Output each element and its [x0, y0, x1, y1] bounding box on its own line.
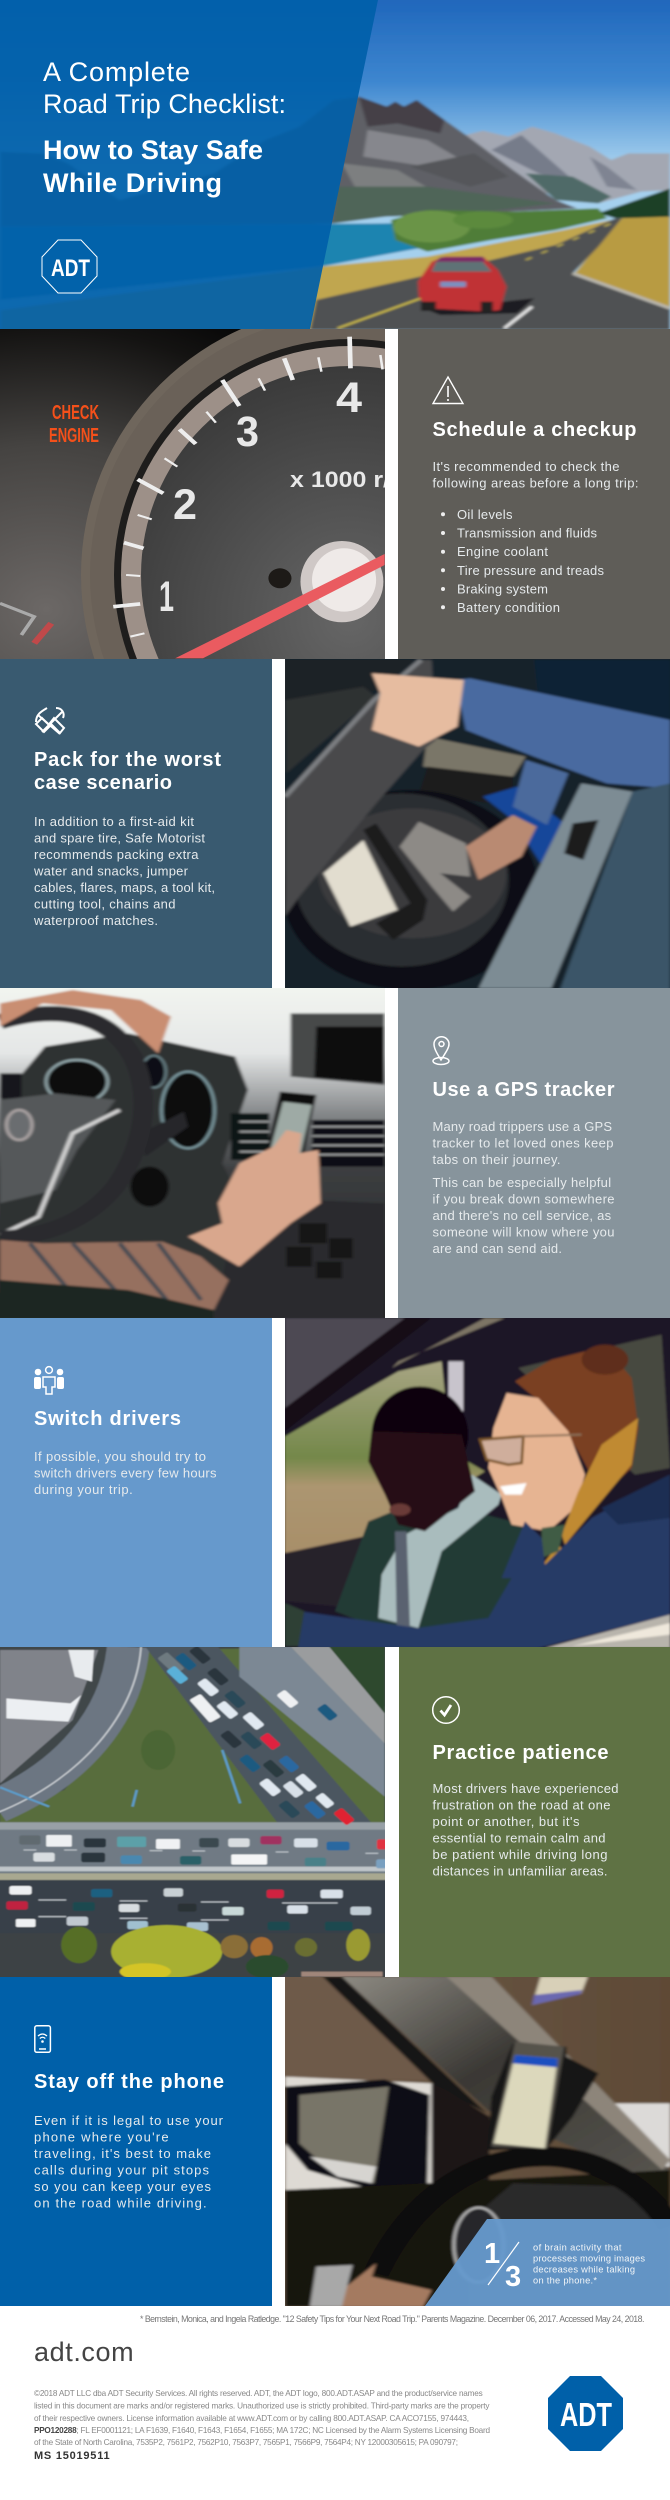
panel: pack for the worst case scenario: [0, 659, 272, 988]
body text: distances in unfamiliar areas.: [432, 1864, 608, 1878]
body text: tabs on their journey.: [432, 1152, 560, 1167]
body text: cables, flares, maps, a tool kit,: [34, 880, 215, 895]
photo: hand touching phone on dashboard: [0, 987, 389, 1320]
body text: [33, 814, 215, 928]
body text: are and can send aid.: [432, 1241, 562, 1256]
legal text: [34, 2389, 490, 2462]
legal text: MS 15019511: [34, 2450, 110, 2462]
callout text: on the phone.*: [533, 2276, 597, 2286]
callout text: of brain activity that: [533, 2242, 622, 2252]
bulleted list: Transmission and fluids: [457, 526, 598, 540]
panel: stay off the phone: [0, 1977, 272, 2306]
panel: use a GPS tracker: [398, 988, 670, 1318]
callout text: decreases while talking: [533, 2264, 635, 2274]
body text: frustration on the road at one: [432, 1798, 610, 1812]
body text: recommends packing extra: [34, 847, 199, 862]
intro text: It's recommended to check the: [432, 459, 620, 474]
footnote: * Bernstein, Monica, and Ingela Ratledge. "12 Safety Tips for Your Next Road Trip." Parents Magazine. December 06, 2017. Accessed May 24, 2018.: [140, 2314, 645, 2324]
body text: if you break down somewhere: [432, 1192, 614, 1206]
heading: [34, 749, 221, 794]
body text: someone will know where you: [432, 1224, 614, 1240]
body text: [432, 1119, 614, 1256]
heading: Practice patience: [432, 1742, 608, 1764]
bulleted list: Battery condition: [457, 600, 560, 615]
bulleted list: [441, 507, 604, 615]
ADT logo blue: [548, 2376, 623, 2451]
body text: and spare tire, Safe Motorist: [34, 830, 205, 846]
icon: warning triangle: [433, 377, 463, 404]
body text: water and snacks, jumper: [33, 864, 189, 878]
body text: switch drivers every few hours: [34, 1466, 217, 1480]
photo: check engine tachometer: CHECK: [52, 402, 99, 424]
photo: mountain road with red car: [0, 0, 670, 333]
body text: waterproof matches.: [33, 913, 158, 928]
body text: so you can keep your eyes: [34, 2179, 212, 2194]
hero title: A Complete: [43, 57, 190, 87]
photo: check engine tachometer: 1: [159, 573, 174, 621]
fraction one third: [484, 2238, 521, 2293]
photo: two people in car: [282, 1315, 670, 1651]
callout text: processes moving images: [533, 2254, 645, 2264]
blue overlay panel: [0, 0, 378, 329]
legal text: of the State of North Carolina, 7535P2, 7561P2, 7562P10, 7563P7, 7565P1, 7566P9, 7564P4; NY 12000305615; PA 090797;: [34, 2438, 458, 2447]
body text: Even if it is legal to use your: [34, 2113, 224, 2128]
body text: [34, 2113, 224, 2210]
body text: tracker to let loved ones keep: [432, 1136, 614, 1150]
photo: check engine tachometer: ENGINE: [49, 425, 99, 447]
body text: [34, 1449, 217, 1497]
intro text: [432, 459, 638, 490]
icon: three people: [34, 1367, 64, 1394]
hero banner: [0, 0, 670, 333]
bulleted list: Engine coolant: [457, 544, 548, 559]
fraction one third: 3: [505, 2261, 521, 2293]
body text: point or another, but it's: [432, 1814, 580, 1829]
panel: switch drivers: [0, 1318, 272, 1647]
body text: calls during your pit stops: [34, 2162, 210, 2178]
bulleted list: Tire pressure and treads: [457, 563, 604, 578]
body text: and there's no cell service, as: [432, 1208, 612, 1223]
photo: check engine tachometer: 2: [173, 481, 197, 529]
photo: phone mounted on windshield: [282, 1973, 670, 2310]
body text: In addition to a first-aid kit: [34, 814, 194, 829]
legal text: ©2018 ADT LLC dba ADT Security Services. All rights reserved. ADT, the ADT logo, 800.ADT.ASAP and the product/service names: [34, 2389, 483, 2398]
bulleted list: Braking system: [457, 582, 548, 596]
heading: case scenario: [34, 772, 172, 794]
fraction one third: 1: [484, 2238, 500, 2270]
heading: Pack for the worst: [34, 749, 221, 771]
icon: smartphone with wifi: [35, 2026, 50, 2052]
body text: This can be especially helpful: [432, 1175, 611, 1190]
hero title: Road Trip Checklist:: [43, 89, 286, 119]
body text: essential to remain calm and: [432, 1830, 606, 1846]
ADT logo outline: [42, 240, 97, 293]
body text: Many road trippers use a GPS: [432, 1119, 612, 1134]
intro text: following areas before a long trip:: [432, 476, 638, 490]
hero title: How to Stay Safe: [43, 135, 263, 165]
body text: during your trip.: [34, 1482, 133, 1497]
heading: Schedule a checkup: [432, 419, 636, 441]
body text: If possible, you should try to: [34, 1449, 206, 1464]
ADT logo outline: ADT: [51, 255, 90, 282]
website url: adt.com: [34, 2337, 134, 2367]
body text: be patient while driving long: [432, 1847, 608, 1862]
panel: schedule a checkup: [398, 329, 670, 659]
callout text: [533, 2242, 645, 2286]
heading: Stay off the phone: [34, 2071, 224, 2093]
photo: check engine tachometer: x 1000 r/: [290, 467, 390, 492]
legal text: PPO120288; FL EF0001121; LA F1639, F1640, F1643, F1654, F1655; MA 172C; NC Licensed by the Alarm Systems Licensing Board: [34, 2426, 490, 2435]
legal text: listed in this document are marks and/or registered marks. Unauthorized use is strictly prohibited. Third-party marks are the property: [34, 2402, 490, 2410]
hero title: While Driving: [43, 168, 222, 198]
photo: check engine tachometer: 3: [236, 408, 259, 456]
photo: spare tire well in car trunk: [282, 657, 670, 993]
photo: check engine tachometer: 4: [336, 374, 362, 422]
panel: practice patience: [399, 1647, 670, 1977]
callout: 1/3 of brain activity: [425, 2219, 670, 2306]
body text: cutting tool, chains and: [34, 896, 176, 912]
icon: check mark in circle: [433, 1697, 459, 1723]
bulleted list: Oil levels: [457, 507, 513, 522]
photo: aerial view of highway traffic: [0, 1643, 389, 1980]
icon: map pin: [433, 1037, 449, 1064]
body text: phone where you're: [34, 2130, 169, 2144]
body text: Most drivers have experienced: [432, 1781, 618, 1796]
body text: traveling, it's best to make: [34, 2146, 211, 2161]
photo: check engine tachometer: [0, 329, 385, 659]
ADT logo blue: ADT: [560, 2396, 612, 2433]
hero title: [43, 57, 286, 198]
heading: Switch drivers: [34, 1408, 181, 1430]
body text: on the road while driving.: [34, 2196, 207, 2210]
body text: [432, 1781, 618, 1878]
heading: Use a GPS tracker: [432, 1079, 615, 1101]
legal text: of their respective owners. License information available at www.ADT.com or by calling 800.ADT.ASAP. CA ACO7155, 974443,: [34, 2414, 469, 2423]
icon: wrench and screwdriver: [36, 708, 64, 734]
